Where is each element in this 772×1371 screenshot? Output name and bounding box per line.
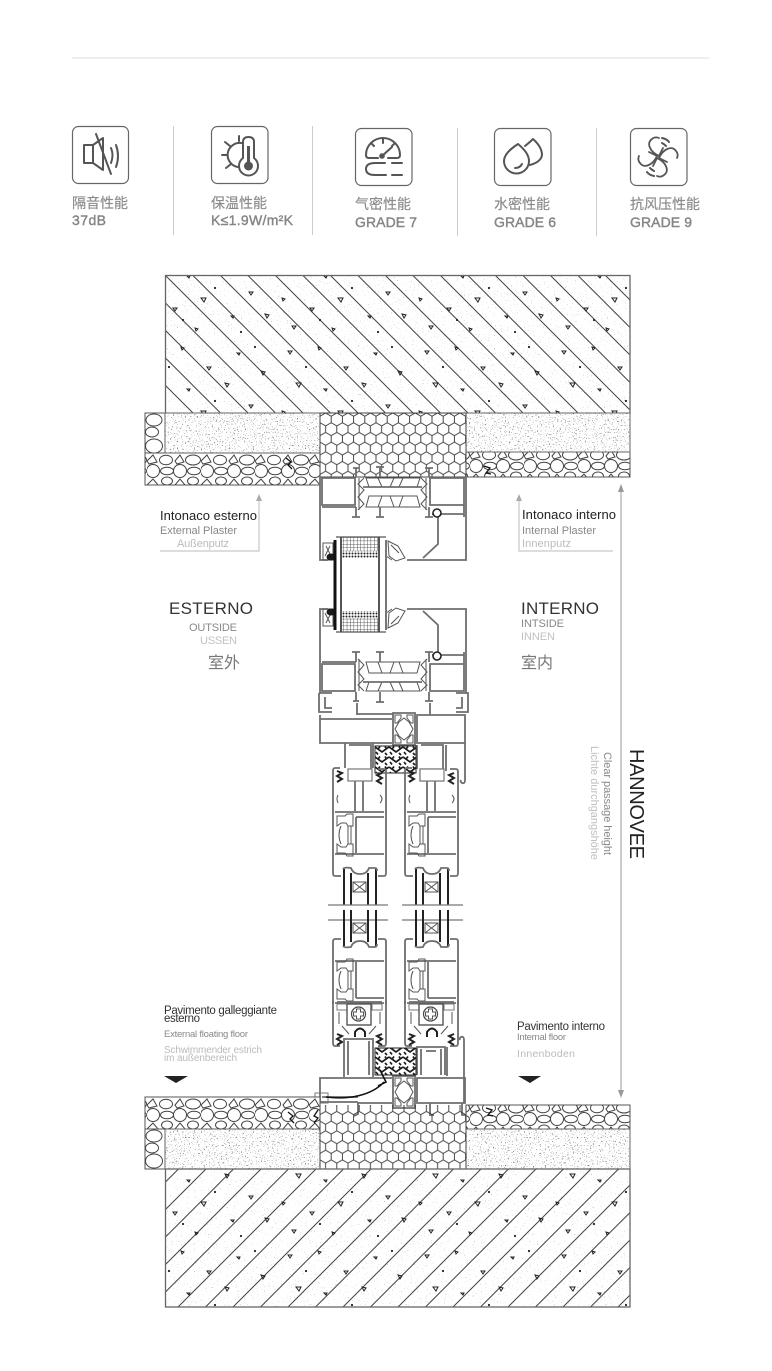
callout: internal floor: Pavimento interno <box>517 1021 605 1033</box>
callout: external floating floor <box>164 1005 277 1083</box>
value: 37dB: 37dB <box>72 212 106 228</box>
callout: external floating floor: External floating floor <box>164 1029 248 1040</box>
vertical label: HANNOVEE: HANNOVEE <box>625 749 647 859</box>
item: thermal insulation <box>211 126 294 228</box>
right upper sash <box>405 768 458 905</box>
label: outside: ESTERNO <box>169 599 253 618</box>
lower transom <box>319 693 468 783</box>
label: inside <box>521 599 599 672</box>
icon: sun and thermometer <box>212 126 268 184</box>
lower fixed frame (mirrored) <box>320 608 466 702</box>
item: sound insulation <box>72 126 128 228</box>
central sliding panel <box>334 537 387 632</box>
pebble column on the outer wall edge <box>145 413 165 453</box>
callout: internal plaster <box>516 494 616 551</box>
value: grade 9: GRADE 9 <box>630 214 692 230</box>
callout: external floating floor: Schwimmender estrich <box>164 1045 262 1056</box>
callout: internal plaster: Internal Plaster <box>522 525 596 537</box>
icon: level marker <box>164 1076 188 1083</box>
item: air tightness <box>355 128 417 230</box>
callout: internal plaster: Innenputz <box>522 538 571 550</box>
callout: internal floor: Innenboden <box>517 1048 575 1060</box>
item: wind resistance <box>630 128 700 230</box>
label: air tightness: 气密性能 <box>355 196 411 212</box>
callout: external plaster: Intonaco esterno <box>160 508 257 523</box>
sill <box>315 1037 466 1116</box>
label: inside: INTERNO <box>521 599 599 618</box>
item: water tightness <box>494 128 556 230</box>
callout: external floating floor: Pavimento galleggiante <box>164 1005 277 1017</box>
callout: external floating floor: im außenbereich <box>164 1053 237 1064</box>
icon: muted speaker <box>72 126 128 184</box>
callout: internal floor <box>517 1021 605 1083</box>
callout: external plaster <box>160 494 262 551</box>
value: grade 7: GRADE 7 <box>355 214 417 230</box>
value: thermal coefficient: K≤1.9W/m²K <box>211 212 294 228</box>
vertical label: clear passage height: Clear passage height <box>601 752 613 855</box>
top rule <box>72 57 709 59</box>
callout: internal floor: Internal floor <box>517 1032 566 1043</box>
value: grade 6: GRADE 6 <box>494 214 556 230</box>
callout: internal plaster: Intonaco interno <box>522 507 616 522</box>
dimension arrow: clear passage height <box>618 484 624 1098</box>
icon: fan <box>630 128 687 186</box>
section drawing <box>145 275 630 1307</box>
callout: external plaster: Außenputz <box>177 538 229 550</box>
bottom floor layers: pebbles, plaster, insulation <box>145 1097 630 1169</box>
label: inside: INTSIDE <box>521 618 564 630</box>
icon: water drops <box>494 128 551 186</box>
callout: external plaster: External Plaster <box>160 525 237 537</box>
label: inside: 室内 <box>521 654 553 672</box>
label: outside: 室外 <box>208 654 240 672</box>
callout: external floating floor: esterno <box>164 1013 200 1025</box>
label: outside: OUTSIDE <box>189 622 237 634</box>
icon: gauge <box>356 128 412 186</box>
top concrete slab <box>165 275 630 414</box>
right lower sash <box>405 910 458 1046</box>
top wall layers: plaster, pebbles, insulation <box>145 413 630 485</box>
performance icon row <box>72 126 700 236</box>
label: water tightness: 水密性能 <box>494 196 550 212</box>
upper fixed frame <box>320 467 466 561</box>
label: outside <box>169 599 253 672</box>
vertical label: German clear passage height: Lichte durchgangshöhe <box>588 746 600 860</box>
section break lines <box>326 905 466 920</box>
left lower sash <box>333 910 386 1046</box>
label: outside: USSEN <box>200 635 237 647</box>
label: inside: INNEN <box>521 631 555 643</box>
bottom concrete slab <box>165 1169 630 1307</box>
label: thermal insulation: 保温性能 <box>211 195 267 211</box>
pebble column on the outer floor edge <box>145 1129 165 1169</box>
left upper sash <box>333 768 386 905</box>
icon: level marker <box>518 1076 541 1083</box>
label: sound insulation: 隔音性能 <box>72 195 128 211</box>
label: wind resistance: 抗风压性能 <box>630 196 700 212</box>
